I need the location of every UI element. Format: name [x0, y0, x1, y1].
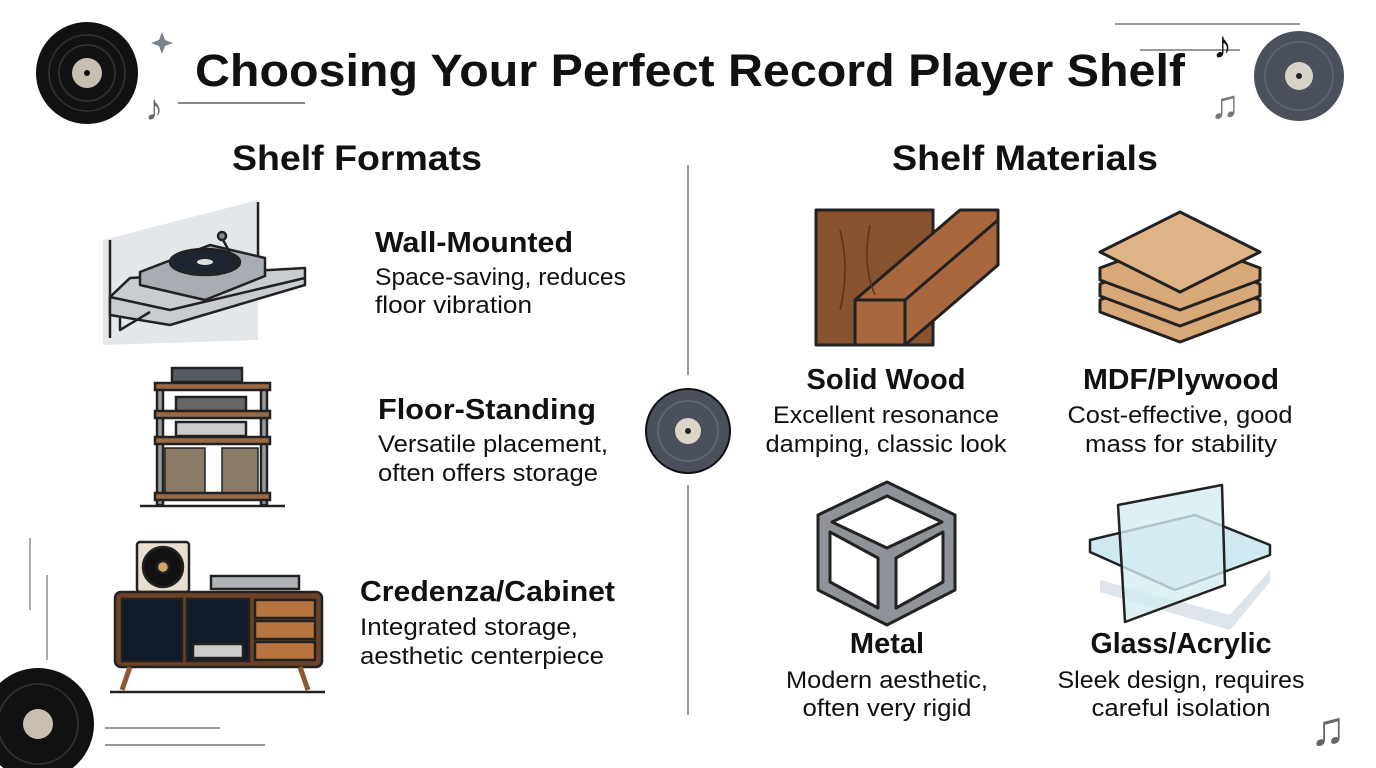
icon: wall-mounted shelf: [103, 200, 305, 345]
icon: record bottom-left: [0, 538, 265, 768]
text: credenza: [360, 576, 615, 670]
text: mdf: mass for stability: [1085, 431, 1277, 458]
title: Choosing Your Perfect Record Player Shelf: [195, 45, 1186, 96]
icon: decorative sparkle and note top-left: ♪: [145, 87, 163, 128]
text: mdf: MDF/Plywood: [1083, 364, 1279, 396]
divider with center record: [646, 165, 730, 715]
text: wall-mounted: Space-saving, reduces: [375, 264, 626, 291]
text: metal: Metal: [850, 628, 924, 660]
text: wall-mounted: [375, 227, 626, 319]
text: mdf: Cost-effective, good: [1068, 402, 1292, 429]
text: credenza: Credenza/Cabinet: [360, 576, 615, 608]
icon: note bottom-right: ♫: [1310, 703, 1346, 756]
icon: record top-right with notes: ♫: [1210, 83, 1240, 127]
text: solid wood: Excellent resonance: [773, 402, 999, 429]
text: floor-standing: Versatile placement,: [378, 431, 608, 458]
text: floor-standing: [378, 394, 608, 487]
icon: glass: [1090, 485, 1270, 630]
text: solid wood: [766, 364, 1008, 458]
text: solid wood: Solid Wood: [806, 364, 966, 396]
icon: record top-right with notes: [1115, 24, 1344, 127]
text: glass: [1058, 628, 1304, 722]
text: glass: Glass/Acrylic: [1090, 628, 1272, 660]
icon: solid wood: [816, 210, 998, 345]
text: metal: Modern aesthetic,: [786, 667, 988, 694]
text: credenza: aesthetic centerpiece: [360, 643, 604, 670]
text: glass: careful isolation: [1092, 695, 1270, 722]
text: mdf: [1068, 364, 1292, 458]
heading: shelf materials: Shelf Materials: [892, 139, 1158, 178]
text: glass: Sleek design, requires: [1058, 667, 1304, 694]
text: wall-mounted: floor vibration: [375, 292, 532, 319]
text: credenza: Integrated storage,: [360, 614, 578, 641]
icon: floor-standing rack: [140, 368, 285, 506]
text: metal: [786, 628, 988, 722]
text: wall-mounted: Wall-Mounted: [375, 227, 573, 259]
text: floor-standing: often offers storage: [378, 460, 598, 487]
icon: credenza: [110, 542, 325, 692]
icon: mdf plywood: [1100, 212, 1260, 342]
icon: metal frame: [818, 482, 955, 625]
text: metal: often very rigid: [802, 695, 972, 722]
icon: record top-left: [36, 22, 138, 124]
text: floor-standing: Floor-Standing: [378, 394, 596, 426]
text: solid wood: damping, classic look: [766, 431, 1008, 458]
icon: record top-right with notes: ♪: [1213, 25, 1232, 67]
icon: decorative sparkle and note top-left: [145, 32, 305, 128]
heading: shelf formats: Shelf Formats: [232, 139, 482, 178]
